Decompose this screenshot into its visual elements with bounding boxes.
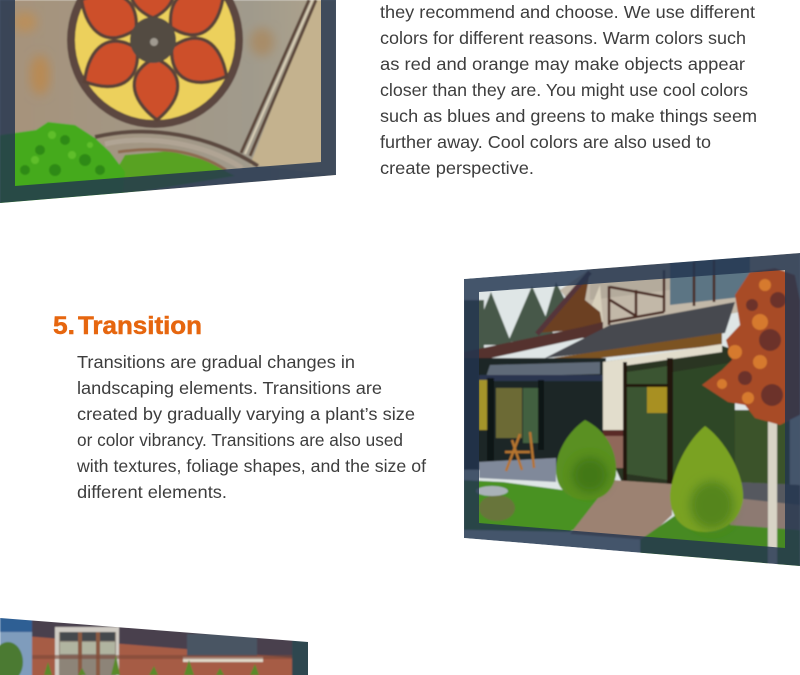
photo frame overlay (0, 0, 336, 203)
text block: transition paragraph: or color vibrancy. Transitions are also used (77, 430, 403, 450)
text block: transition paragraph (76, 352, 426, 502)
text block: color paragraph (380, 2, 757, 178)
photo: mosaic paving with flower pattern (0, 0, 336, 210)
heading: 5. Transition: 5. (53, 312, 75, 340)
text block: color paragraph: such as blues and greens to make things seem (380, 106, 757, 126)
maple tree foliage (702, 268, 800, 425)
text block: transition paragraph: created by gradually varying a plant’s size (77, 404, 415, 424)
heading: 5. Transition: Transition (78, 312, 202, 340)
photo frame overlay (464, 253, 800, 566)
text block: color paragraph: they recommend and choose. We use different (380, 2, 755, 22)
text block: transition paragraph: Transitions are gradual changes in (77, 352, 355, 372)
text block: transition paragraph: landscaping elements. Transitions are (77, 378, 382, 398)
photo: brick house (0, 618, 308, 675)
text block: color paragraph: as red and orange may make objects appear (380, 54, 745, 74)
shrub right (670, 426, 743, 532)
text block: color paragraph: create perspective. (380, 158, 534, 178)
text block: transition paragraph: with textures, foliage shapes, and the size of (76, 456, 426, 476)
photo: house with terrace and shrubs (464, 250, 800, 570)
text block: transition paragraph: different elements. (77, 482, 227, 502)
shrub left (556, 420, 616, 500)
text block: color paragraph: closer than they are. You might use cool colors (380, 80, 748, 100)
text block: color paragraph: colors for different reasons. Warm colors such (380, 28, 746, 48)
text block: color paragraph: further away. Cool colors are also used to (380, 132, 711, 152)
